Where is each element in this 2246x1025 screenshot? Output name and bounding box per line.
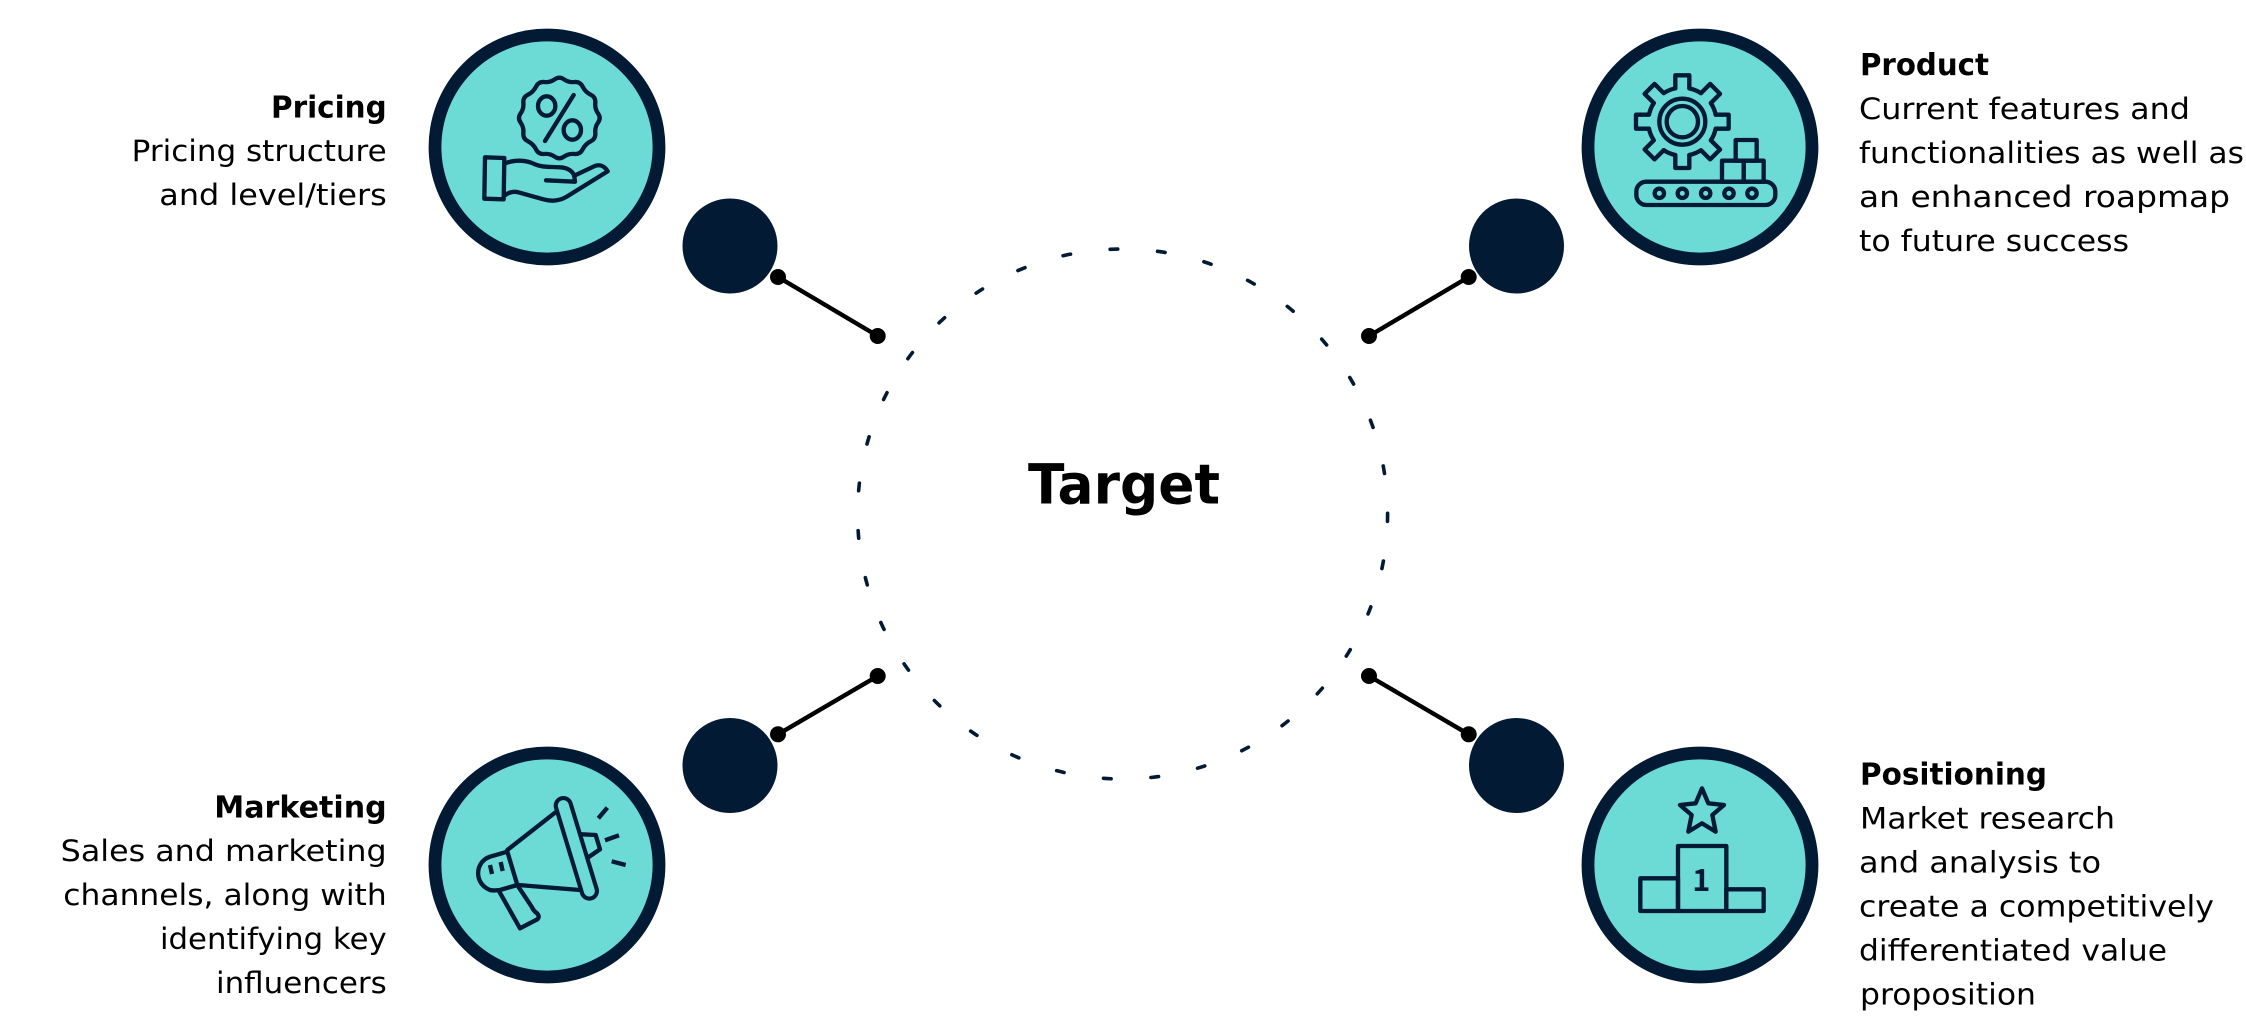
description: positioning: Market research <box>1860 801 2115 835</box>
description: pricing: and level/tiers <box>159 178 387 212</box>
text block: product <box>1859 48 2244 258</box>
icon: pricing, hand holding percent badge <box>435 35 659 259</box>
description: positioning <box>1859 801 2214 1011</box>
icon: positioning, podium with star <box>1588 753 1812 977</box>
heading: Marketing: Marketing <box>214 790 387 825</box>
description: positioning: and analysis to <box>1859 845 2101 879</box>
connector: positioning <box>1361 668 1564 813</box>
description: marketing: Sales and marketing <box>61 834 387 868</box>
text block: positioning <box>1859 757 2214 1011</box>
icon: product, gear and conveyor <box>1588 35 1812 259</box>
description: marketing: influencers <box>216 966 387 1000</box>
description: marketing: channels, along with <box>63 878 387 912</box>
description: positioning: differentiated value <box>1859 933 2167 967</box>
description: positioning: create a competitively <box>1859 889 2214 923</box>
dashed central circle <box>858 249 1388 779</box>
description: product: to future success <box>1859 224 2129 258</box>
description: pricing: Pricing structure <box>132 134 387 168</box>
description: product: Current features and <box>1859 92 2190 126</box>
description: positioning: proposition <box>1860 977 2036 1011</box>
description: marketing: identifying key <box>160 922 387 956</box>
connector: pricing <box>682 198 886 344</box>
description: marketing <box>61 834 387 1000</box>
icon: marketing, megaphone <box>435 753 659 977</box>
heading: Positioning: Positioning <box>1860 757 2047 792</box>
text block: marketing <box>61 790 387 1000</box>
connector: product <box>1361 198 1564 344</box>
description: product: an enhanced roapmap <box>1859 180 2230 214</box>
heading: Product: Product <box>1860 48 1989 83</box>
title: Target: Target <box>1028 452 1220 516</box>
connector: marketing <box>682 668 886 813</box>
heading: Pricing: Pricing <box>271 90 387 125</box>
description: product <box>1859 92 2244 258</box>
icon: positioning, podium with star: 1 <box>1692 855 1710 900</box>
description: pricing <box>132 134 387 212</box>
description: product: functionalities as well as <box>1859 136 2244 170</box>
text block: pricing <box>132 90 387 212</box>
